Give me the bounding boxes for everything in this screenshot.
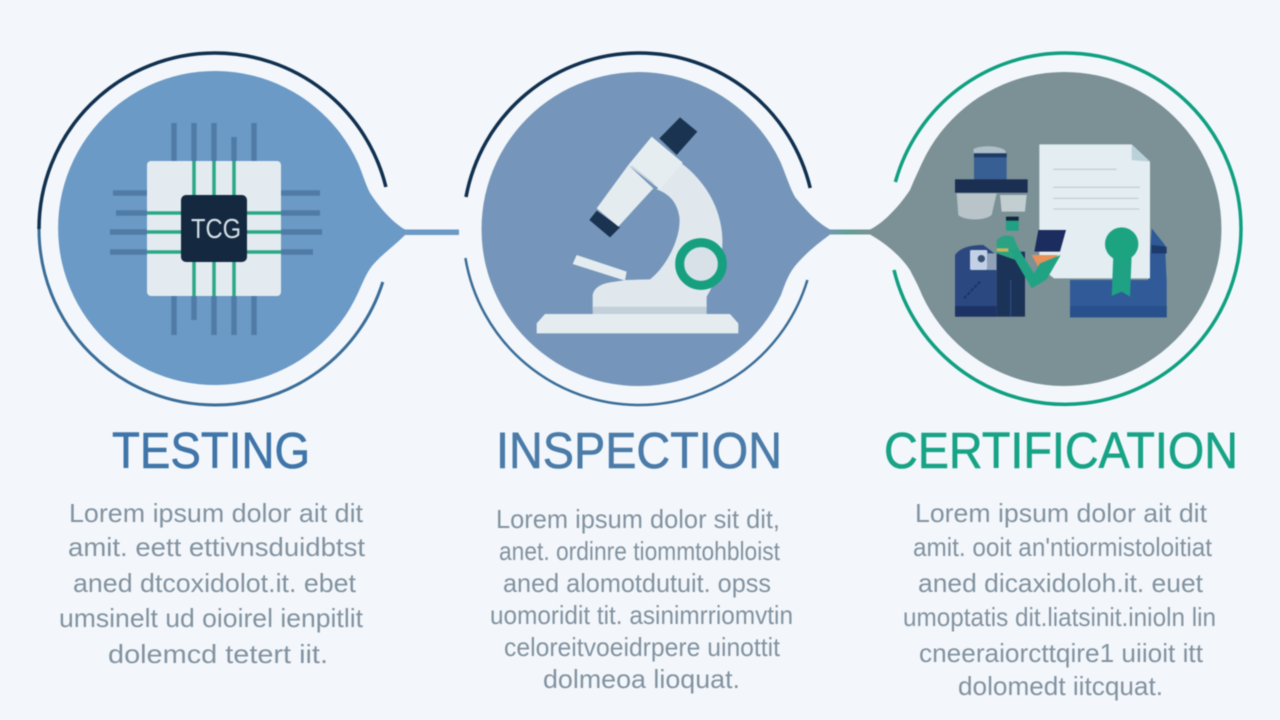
icon: circuit chip	[110, 123, 322, 335]
text block: testing: umsinelt ud oioirel ienpitlit	[59, 603, 364, 633]
heading: testing: TESTING	[112, 422, 310, 479]
icon: circuit chip: TCG	[191, 213, 241, 244]
text block: testing: amit. eett ettivnsduidbtst	[68, 532, 366, 562]
text block: testing: dolemcd tetert iit.	[108, 639, 328, 669]
text block: certification: cneeraiorcttqire1 uiioit itt	[919, 638, 1204, 668]
panel: inspection	[465, 53, 872, 694]
icon: certificate and inspector	[955, 144, 1167, 317]
text block: inspection: celoreitvoeidrpere uinottit	[504, 632, 781, 662]
connector to certification	[826, 230, 872, 234]
panel: certification	[870, 53, 1241, 701]
text block: certification: umoptatis dit.liatsinit.inioln lin	[903, 602, 1216, 632]
circle with connector: testing	[58, 71, 459, 385]
text block: inspection: dolmeoa lioquat.	[543, 664, 740, 694]
text block: testing: aned dtcoxidolot.it. ebet	[73, 568, 357, 598]
icon: microscope	[537, 117, 738, 333]
text block: testing: Lorem ipsum dolor ait dit	[69, 498, 364, 528]
ring: inspection	[465, 53, 810, 405]
heading: certification: CERTIFICATION	[884, 422, 1238, 479]
circle with connector: inspection	[482, 72, 830, 386]
text block: inspection: aned alomotdutuit. opss	[503, 568, 771, 598]
text block: certification: Lorem ipsum dolor ait dit	[915, 498, 1208, 528]
text block: certification	[903, 498, 1216, 701]
panel: testing	[39, 53, 459, 669]
text block: testing	[59, 498, 366, 669]
text block: certification: amit. ooit an'ntiormistoloitiat	[913, 532, 1213, 562]
text block: inspection: uomoridit tit. asinimrriomvtin	[490, 600, 793, 630]
ring: certification	[894, 53, 1241, 404]
text block: certification: dolomedt iitcquat.	[958, 671, 1163, 701]
text block: inspection: anet. ordinre tiommtohbloist	[499, 536, 781, 566]
text block: certification: aned dicaxidoloh.it. euet	[918, 568, 1204, 598]
text block: inspection: Lorem ipsum dolor sit dit,	[496, 504, 780, 534]
heading: inspection: INSPECTION	[496, 422, 782, 479]
text block: inspection	[490, 504, 793, 694]
circle with connector: certification	[870, 72, 1221, 386]
ring: testing	[39, 53, 386, 405]
